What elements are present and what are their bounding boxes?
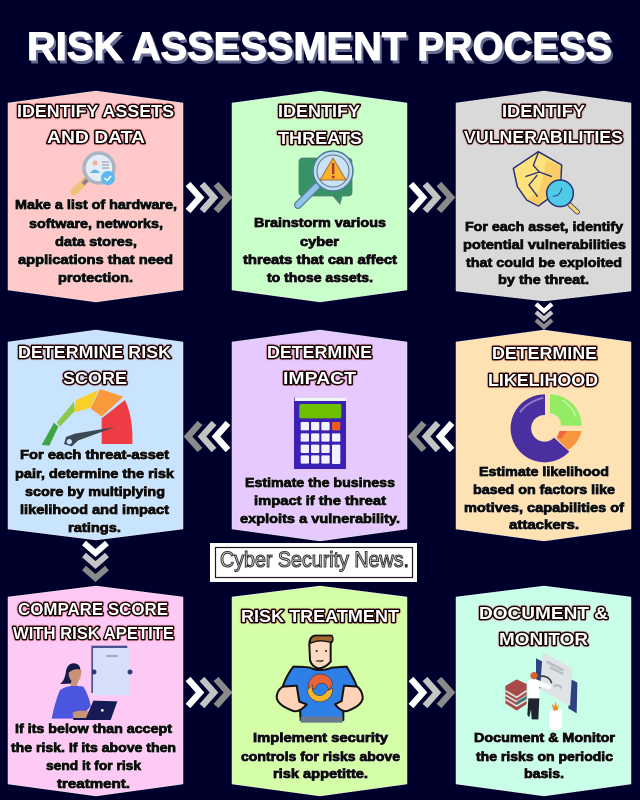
arrow: vulnerabilities down to likelihood: [536, 304, 552, 327]
icon: threat magnifier: [298, 151, 353, 205]
panel: determine likelihood: [456, 330, 631, 541]
body text: [240, 475, 400, 526]
icon: person at board with books: [505, 653, 577, 730]
arrow: likelihood to impact: [412, 423, 452, 450]
heading: determine risk score: DETERMINE RISK: [18, 342, 171, 362]
body text: basis.: [524, 766, 564, 781]
body text: to those assets.: [267, 270, 373, 285]
heading: document and monitor: MONITOR: [499, 629, 588, 649]
title: RISK ASSESSMENT PROCESS: [27, 25, 612, 69]
icon: donut chart: [511, 394, 582, 462]
icon: woman at laptop with document: [52, 646, 132, 720]
body text: Brainstorm various: [254, 215, 386, 230]
heading: determine impact: IMPACT: [283, 368, 356, 388]
body text: threats that can affect: [243, 252, 398, 267]
heading: compare score with risk apetite: COMPARE SCORE: [18, 599, 168, 619]
arrow: treatment to document: [411, 679, 451, 706]
panel: document and monitor: [456, 586, 631, 796]
icon: cracked shield with magnifier: [513, 152, 577, 212]
body text: motives, capabilities of: [464, 500, 625, 515]
body text: the risk. If its above then: [11, 740, 176, 755]
body text: [243, 215, 398, 285]
body text: For each threat-asset: [20, 447, 170, 462]
body text: send it for risk: [46, 758, 142, 773]
body text: [241, 730, 400, 781]
arrow: compare to treatment: [188, 679, 228, 706]
icon: risk gauge: [42, 389, 132, 446]
heading: compare score with risk apetite: [13, 599, 174, 643]
heading: determine likelihood: DETERMINE: [492, 343, 597, 363]
heading: identify threats: IDENTIFY: [278, 101, 360, 121]
body text: Implement security: [253, 730, 389, 745]
heading: compare score with risk apetite: WITH RISK APETITE: [13, 623, 174, 643]
heading: identify threats: [278, 101, 362, 148]
arrow: threats to vulnerabilities: [411, 184, 451, 211]
arrow: impact to risk score: [188, 423, 228, 450]
body text: potential vulnerabilities: [463, 237, 626, 252]
body text: cyber: [300, 234, 339, 249]
heading: determine likelihood: [488, 343, 598, 390]
body text: ratings.: [68, 520, 121, 535]
body text: score by multiplying: [25, 484, 165, 499]
body text: the risks on periodic: [476, 749, 613, 764]
body text: Document & Monitor: [474, 730, 615, 745]
heading: determine risk score: SCORE: [63, 368, 127, 388]
icon: magnifier with profile: [74, 153, 115, 192]
body text: by the threat.: [498, 272, 589, 287]
heading: determine risk score: [18, 342, 171, 388]
body text: pair, determine the risk: [15, 466, 175, 481]
heading: identify vulnerabilities: [464, 101, 623, 147]
body text: Estimate likelihood: [479, 464, 609, 479]
panel: risk treatment: [232, 586, 407, 796]
heading: identify vulnerabilities: VULNERABILITIES: [464, 127, 623, 147]
body text: Estimate the business: [245, 475, 395, 490]
panel: compare score with risk appetite: [8, 586, 183, 796]
body text: treatment.: [57, 776, 130, 791]
body text: [464, 464, 625, 532]
body text: risk appetitte.: [273, 766, 368, 781]
heading: document and monitor: [479, 603, 608, 649]
heading: identify threats: THREATS: [278, 128, 362, 148]
heading: determine impact: [267, 342, 372, 388]
logo: cyber security news: [210, 543, 417, 582]
panel: identify assets and data: [8, 91, 183, 302]
heading: identify assets and data: AND DATA: [47, 127, 145, 147]
body text: likelihood and impact: [20, 502, 170, 517]
heading: identify assets and data: IDENTIFY ASSETS: [17, 101, 174, 121]
heading: risk treatment: RISK TREATMENT: [241, 606, 399, 626]
body text: If its below than accept: [15, 721, 173, 736]
body text: [463, 219, 626, 287]
body text: impact if the threat: [254, 493, 387, 508]
logo: cyber security news: Cyber Security News.: [220, 547, 409, 572]
panel: determine impact: [232, 330, 407, 541]
body text: that could be exploited: [466, 255, 622, 270]
heading: determine impact: DETERMINE: [267, 342, 372, 362]
body text: based on factors like: [473, 482, 615, 497]
body text: software, networks,: [29, 216, 163, 231]
body text: Make a list of hardware,: [15, 197, 177, 212]
body text: [474, 730, 615, 781]
body text: controls for risks above: [241, 749, 400, 764]
panel: identify vulnerabilities: [456, 91, 631, 301]
arrow: risk score down to compare: [84, 543, 107, 578]
body text: attackers.: [509, 517, 579, 532]
heading: identify vulnerabilities: IDENTIFY: [502, 101, 585, 121]
heading: identify assets and data: [17, 101, 174, 147]
body text: For each asset, identify: [465, 219, 624, 234]
panel: determine risk score: [8, 330, 183, 540]
body text: data stores,: [55, 234, 137, 249]
body text: [11, 721, 176, 791]
icon: man with refresh symbol: [277, 636, 363, 723]
icon: calculator: [294, 397, 346, 469]
arrow: identify assets to threats: [188, 184, 228, 211]
body text: exploits a vulnerability.: [240, 511, 400, 526]
body text: protection.: [58, 270, 133, 285]
body text: [15, 197, 177, 285]
heading: document and monitor: DOCUMENT &: [479, 603, 608, 623]
heading: determine likelihood: LIKELIHOOD: [488, 370, 598, 390]
body text: applications that need: [18, 252, 173, 267]
panel: identify threats: [232, 91, 407, 302]
body text: [15, 447, 175, 535]
